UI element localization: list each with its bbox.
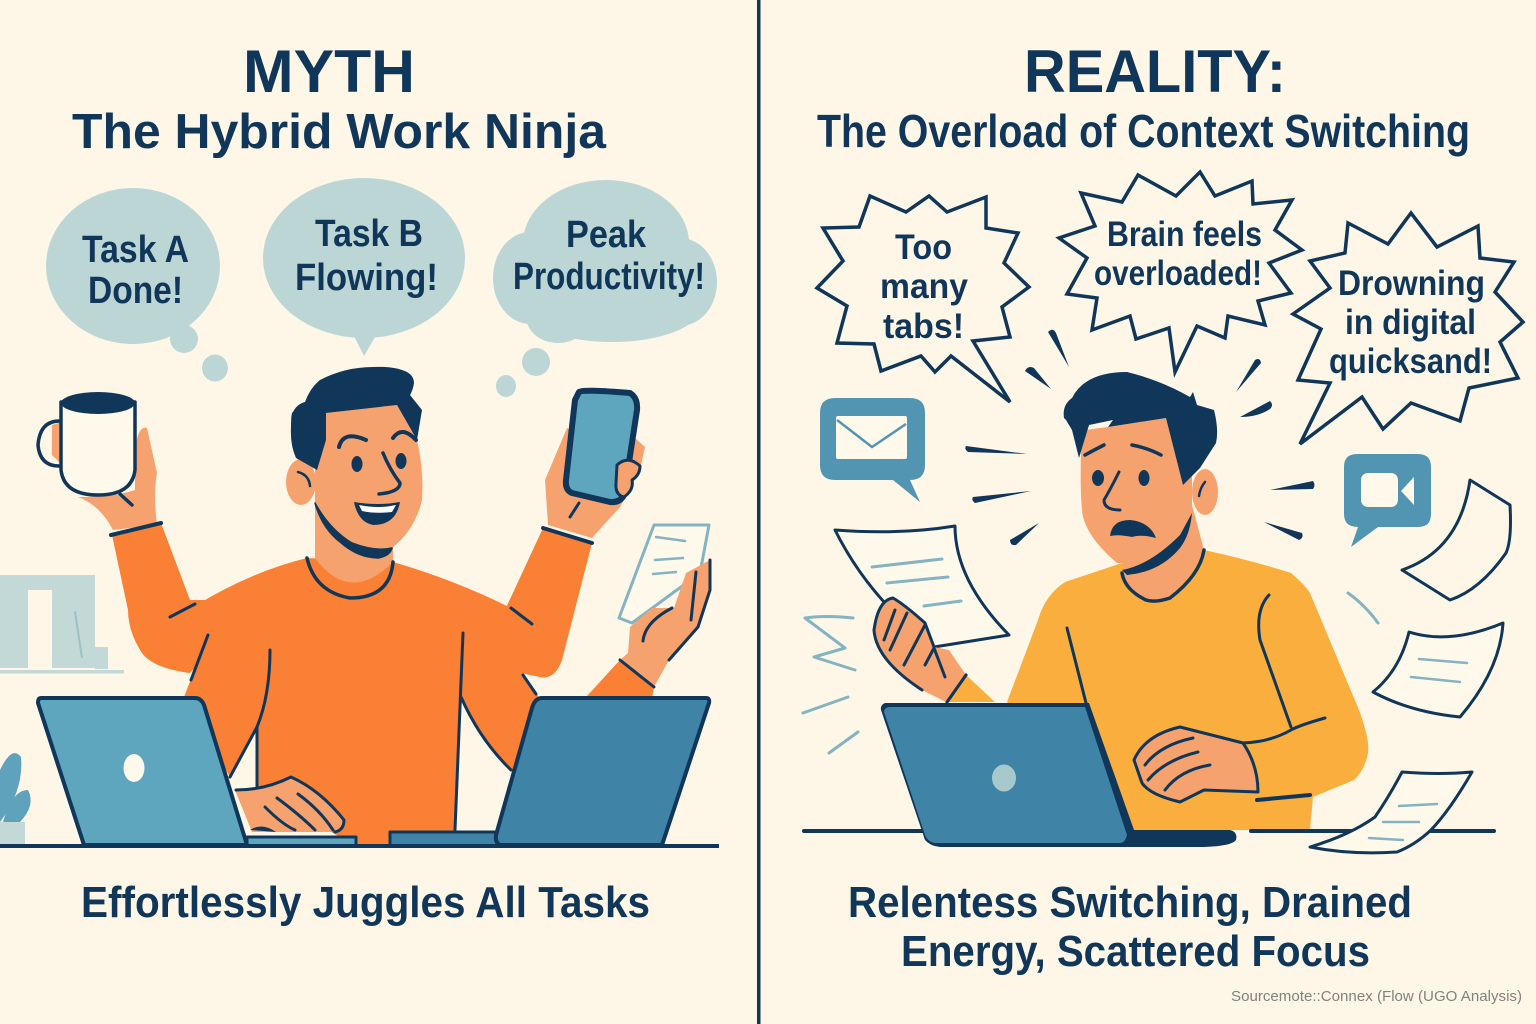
sweater bbox=[1007, 550, 1368, 830]
burst bubble: brain feels overloaded: overloaded! bbox=[1094, 254, 1262, 293]
thought bubble: task a: Task A bbox=[82, 229, 189, 271]
source note: Sourcemote::Connex (Flow (UGO Analysis) bbox=[1231, 988, 1522, 1005]
thought bubble: task a: Done! bbox=[88, 270, 183, 312]
panel: myth bbox=[0, 38, 719, 927]
caption: myth: Effortlessly Juggles All Tasks bbox=[81, 878, 650, 927]
background shelf bbox=[0, 575, 124, 674]
neck and head bbox=[1064, 372, 1218, 601]
desk line bbox=[0, 844, 719, 848]
burst bubble: too many tabs: tabs! bbox=[883, 307, 964, 346]
panel: reality bbox=[803, 38, 1523, 1005]
burst bubble: brain feels overloaded: Brain feels bbox=[1107, 215, 1262, 254]
icon: video call bubble bbox=[1344, 454, 1431, 547]
laptop bbox=[881, 703, 1236, 847]
speech bubble: task b: Flowing! bbox=[295, 257, 438, 299]
stress spark marks bbox=[965, 330, 1314, 545]
burst bubble: drowning in digital quicksand: quicksand! bbox=[1329, 342, 1492, 381]
hand holding paper bbox=[874, 598, 966, 702]
right laptop bbox=[390, 698, 709, 846]
open hand bbox=[620, 560, 710, 687]
raised hand holding mug bbox=[78, 428, 157, 530]
caption: reality bbox=[848, 878, 1412, 976]
held paper bbox=[835, 526, 1009, 647]
thought bubble: task a bbox=[46, 188, 228, 382]
floating paper: top bbox=[1402, 480, 1510, 600]
caption: reality: Relentess Switching, Drained bbox=[848, 878, 1412, 927]
title: myth: MYTH bbox=[243, 38, 415, 105]
head bbox=[286, 367, 422, 598]
title: reality: REALITY: bbox=[1024, 38, 1286, 105]
typing hand bbox=[1134, 727, 1310, 802]
floating paper: middle bbox=[1373, 623, 1503, 717]
burst bubble: brain feels overloaded bbox=[1059, 172, 1302, 372]
left laptop bbox=[38, 698, 356, 846]
paper in hand bbox=[619, 525, 709, 623]
mug bbox=[38, 392, 135, 505]
subtitle: the hybrid work ninja: The Hybrid Work Ninja bbox=[72, 105, 607, 159]
character: reality worker bbox=[803, 372, 1510, 853]
phone bbox=[566, 391, 637, 502]
character: myth worker bbox=[38, 367, 710, 846]
burst bubble: too many tabs: Too bbox=[895, 228, 952, 267]
hand holding phone bbox=[545, 428, 645, 538]
desk line bbox=[804, 829, 1494, 833]
background plant bbox=[0, 753, 31, 844]
phone fingers bbox=[616, 460, 640, 497]
burst bubble: too many tabs: many bbox=[880, 267, 969, 306]
burst bubble: drowning in digital quicksand: in digital bbox=[1345, 303, 1476, 342]
hand on keyboard bbox=[235, 777, 344, 832]
upper arms and torso sweater bbox=[112, 523, 654, 846]
burst bubble: drowning in digital quicksand bbox=[1293, 213, 1523, 444]
speech bubble: task b bbox=[263, 178, 465, 356]
caption: reality: Energy, Scattered Focus bbox=[901, 927, 1370, 976]
thought bubble: peak productivity bbox=[493, 180, 717, 397]
icon: email bubble bbox=[820, 398, 925, 502]
speech bubble: task b: Task B bbox=[315, 213, 423, 255]
teal motion squiggles bbox=[803, 593, 1378, 753]
floating paper: bottom bbox=[1310, 772, 1472, 853]
thought bubble: peak productivity: Peak bbox=[566, 214, 647, 256]
thought bubble: peak productivity: Productivity! bbox=[513, 256, 705, 298]
burst bubble: drowning in digital quicksand: Drowning bbox=[1338, 264, 1485, 303]
burst bubble: too many tabs bbox=[817, 196, 1029, 402]
